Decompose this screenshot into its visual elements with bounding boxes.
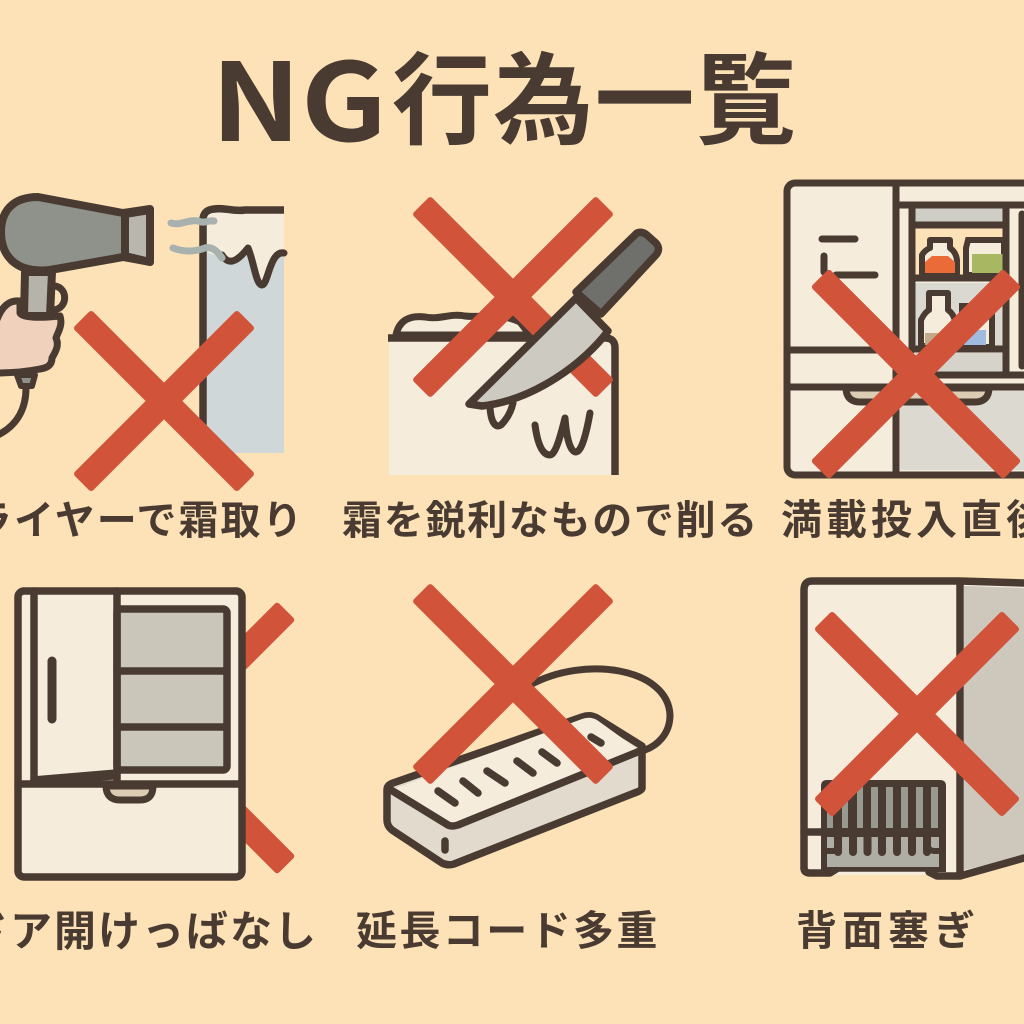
panel: blocked rear vent (796, 581, 1024, 957)
icon: dryer cord (0, 375, 35, 435)
icon: red cross (412, 196, 614, 398)
title: NG (211, 17, 387, 173)
icon: power strip (387, 716, 642, 865)
icon: freezer box (388, 315, 615, 475)
icon: red cross (811, 269, 1021, 479)
title: 行為一覧 (392, 20, 796, 165)
label: 背面塞ぎ (796, 897, 980, 957)
icon: hand holding dryer (0, 301, 61, 373)
icon: red cross (814, 611, 1020, 817)
icon: frost drip and squiggle (490, 403, 590, 455)
icon: fridge with open door (18, 591, 242, 877)
panel: hair dryer defrost (0, 197, 304, 546)
icon: warm air wisps (171, 221, 222, 258)
icon: red cross (73, 310, 255, 492)
icon: red cross (412, 583, 614, 785)
icon: power cord (530, 669, 670, 750)
panel: overloaded power strip (356, 583, 670, 957)
panel: door left open (0, 591, 318, 959)
icon: hair dryer (1, 197, 150, 316)
icon: vent grille (821, 780, 946, 872)
icon: red cross behind fridge (23, 602, 295, 874)
icon: knife (469, 232, 658, 406)
label: 霜を鋭利なもので削る (342, 488, 759, 546)
panel: scraping frost with knife (342, 196, 759, 546)
icon: fridge rear (804, 581, 1024, 876)
icon: open fridge (787, 183, 1024, 475)
title (211, 17, 796, 173)
icon: frosted freezer wall (203, 209, 284, 453)
panel: fully loaded fridge (781, 183, 1024, 546)
label: 延長コード多重 (356, 897, 660, 957)
